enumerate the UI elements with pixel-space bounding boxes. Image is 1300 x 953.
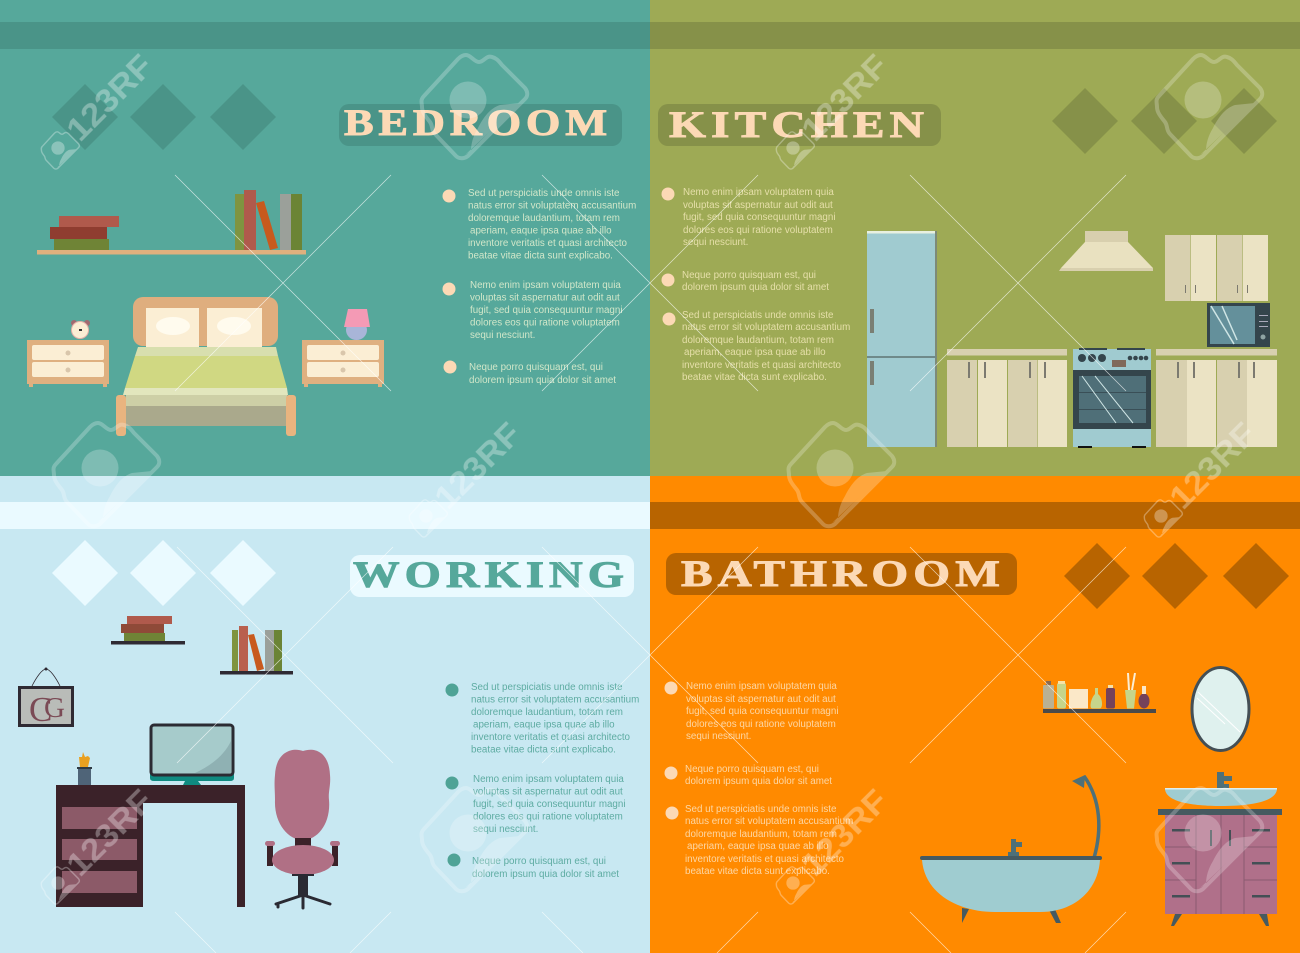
kitchen text list: dolores eos qui ratione voluptatem bbox=[683, 225, 833, 236]
bedroom wall shelf with books bbox=[37, 190, 306, 254]
panel: bedroom background bbox=[0, 0, 650, 476]
upper cabinets bbox=[1165, 235, 1268, 301]
bedroom text list bbox=[442, 188, 636, 386]
watermark cross lines bbox=[175, 175, 1126, 953]
working text list: dolores eos qui ratione voluptatem bbox=[473, 812, 623, 822]
kitchen text list: Nemo enim ipsam voluptatem quia bbox=[683, 187, 834, 198]
working diamonds bbox=[52, 540, 276, 606]
kitchen diamonds bbox=[1052, 88, 1277, 154]
bedroom text list: voluptas sit aspernatur aut odit aut bbox=[470, 292, 620, 304]
kitchen text list: dolorem ipsum quia dolor sit amet bbox=[682, 282, 829, 293]
small watermark logos: 123RF bbox=[59, 48, 160, 148]
left base cabinets bbox=[947, 349, 1067, 447]
small watermark logos: 123RF bbox=[794, 48, 895, 148]
kitchen text list: natus error sit voluptatem accusantium bbox=[682, 322, 850, 333]
heading: kitchen: KITCHEN bbox=[669, 105, 929, 146]
bedroom text list: sequi nesciunt. bbox=[470, 330, 535, 341]
kitchen text list: beatae vitae dicta sunt explicabo. bbox=[682, 372, 827, 383]
working text list: sequi nesciunt. bbox=[473, 824, 538, 835]
panel: bathroom background bbox=[650, 476, 1300, 953]
heading: kitchen bbox=[658, 104, 941, 146]
working text list: beatae vitae dicta sunt explicabo. bbox=[471, 744, 616, 756]
panel: kitchen background bbox=[650, 0, 1300, 476]
bed bbox=[116, 297, 296, 436]
heading: bathroom: BATHROOM bbox=[681, 554, 1005, 595]
kitchen text list: fugit, sed quia consequuntur magni bbox=[683, 212, 836, 223]
bedroom text list: Sed ut perspiciatis unde omnis iste bbox=[468, 188, 620, 199]
microwave bbox=[1207, 303, 1270, 347]
bathroom text list: doloremque laudantium, totam rem bbox=[685, 829, 837, 840]
bedroom text list: dolores eos qui ratione voluptatem bbox=[470, 318, 620, 328]
bathroom text list: Nemo enim ipsam voluptatem quia bbox=[686, 681, 837, 692]
bathtub with shower bbox=[920, 775, 1102, 923]
working text list: Nemo enim ipsam voluptatem quia bbox=[473, 774, 624, 785]
bathroom text list: aperiam, eaque ipsa quae ab illo bbox=[687, 841, 829, 852]
desk bbox=[56, 785, 245, 907]
bedroom text list: doloremque laudantium, totam rem bbox=[468, 213, 620, 224]
working shelf with stacked books bbox=[111, 616, 185, 644]
kitchen text list: sequi nesciunt. bbox=[683, 237, 748, 248]
office chair bbox=[265, 750, 340, 908]
pencil cup bbox=[77, 752, 92, 785]
bedroom diamonds bbox=[52, 84, 276, 150]
bathroom shelf with toiletries bbox=[1043, 673, 1156, 713]
small watermark logos: 123RF bbox=[794, 783, 895, 883]
bathroom text list: voluptas sit aspernatur aut odit aut bbox=[686, 694, 836, 705]
bathroom text list bbox=[664, 681, 853, 877]
bedroom text list: Nemo enim ipsam voluptatem quia bbox=[470, 280, 621, 291]
computer monitor bbox=[150, 725, 234, 785]
working text list: dolorem ipsum quia dolor sit amet bbox=[472, 869, 619, 880]
bedroom text list: beatae vitae dicta sunt explicabo. bbox=[468, 250, 613, 262]
panel: working background bbox=[0, 476, 650, 953]
stove bbox=[1073, 348, 1151, 448]
bathroom text list: inventore veritatis et quasi architecto bbox=[685, 854, 845, 865]
fridge bbox=[867, 231, 937, 447]
bathroom text list: dolorem ipsum quia dolor sit amet bbox=[685, 776, 832, 787]
working text list: natus error sit voluptatem accusantium bbox=[471, 694, 639, 706]
working shelf with upright books bbox=[220, 626, 293, 674]
bathroom text list: natus error sit voluptatem accusantium bbox=[685, 816, 853, 827]
heading: bedroom: BEDROOM bbox=[344, 103, 612, 144]
small watermark logos: 123RF bbox=[1162, 416, 1263, 516]
kitchen text list: voluptas sit aspernatur aut odit aut bbox=[683, 200, 833, 211]
bedroom text list: natus error sit voluptatem accusantium bbox=[468, 200, 636, 212]
sink vanity bbox=[1158, 772, 1282, 926]
working text list bbox=[446, 682, 639, 880]
working text list: Sed ut perspiciatis unde omnis iste bbox=[471, 682, 623, 693]
kitchen text list bbox=[662, 187, 850, 383]
right base cabinets bbox=[1156, 349, 1277, 447]
kitchen text list: Sed ut perspiciatis unde omnis iste bbox=[682, 310, 834, 321]
working text list: Neque porro quisquam est, qui bbox=[472, 856, 606, 867]
bedroom text list: Neque porro quisquam est, qui bbox=[469, 362, 603, 373]
working text list: inventore veritatis et quasi architecto bbox=[471, 732, 631, 743]
bedroom text list: dolorem ipsum quia dolor sit amet bbox=[469, 375, 616, 386]
working text list: aperiam, eaque ipsa quae ab illo bbox=[473, 720, 615, 730]
kitchen text list: Neque porro quisquam est, qui bbox=[682, 270, 816, 281]
working text list: fugit, sed quia consequuntur magni bbox=[473, 799, 626, 810]
nightstand with lamp bbox=[302, 309, 384, 387]
range hood bbox=[1059, 231, 1153, 271]
bathroom text list: Neque porro quisquam est, qui bbox=[685, 764, 819, 775]
bathroom text list: fugit, sed quia consequuntur magni bbox=[686, 706, 838, 717]
working text list: voluptas sit aspernatur aut odit aut bbox=[473, 786, 623, 798]
small watermark logos: 123RF bbox=[59, 783, 160, 883]
kitchen text list: inventore veritatis et quasi architecto bbox=[682, 360, 842, 371]
bathroom text list: beatae vitae dicta sunt explicabo. bbox=[685, 866, 830, 877]
wall picture with monogram: C bbox=[29, 690, 52, 729]
working text list: doloremque laudantium, totam rem bbox=[471, 707, 623, 718]
bathroom diamonds bbox=[1064, 543, 1289, 609]
bedroom text list: inventore veritatis et quasi architecto bbox=[468, 238, 628, 249]
bedroom text list: aperiam, eaque ipsa quae ab illo bbox=[470, 226, 612, 236]
bedroom text list: fugit, sed quia consequuntur magni bbox=[470, 305, 622, 316]
wall picture with monogram bbox=[20, 668, 72, 729]
heading: working: WORKING bbox=[353, 555, 629, 596]
bathroom text list: Sed ut perspiciatis unde omnis iste bbox=[685, 804, 837, 815]
bathroom text list: dolores eos qui ratione voluptatem bbox=[686, 719, 836, 730]
nightstand with clock bbox=[27, 320, 109, 387]
kitchen text list: doloremque laudantium, totam rem bbox=[682, 335, 834, 346]
bathroom text list: sequi nesciunt. bbox=[686, 731, 751, 742]
small watermark logos: 123RF bbox=[427, 416, 528, 516]
kitchen text list: aperiam, eaque ipsa quae ab illo bbox=[684, 347, 826, 358]
wall picture with monogram: G bbox=[44, 692, 65, 724]
oval mirror bbox=[1192, 668, 1249, 750]
